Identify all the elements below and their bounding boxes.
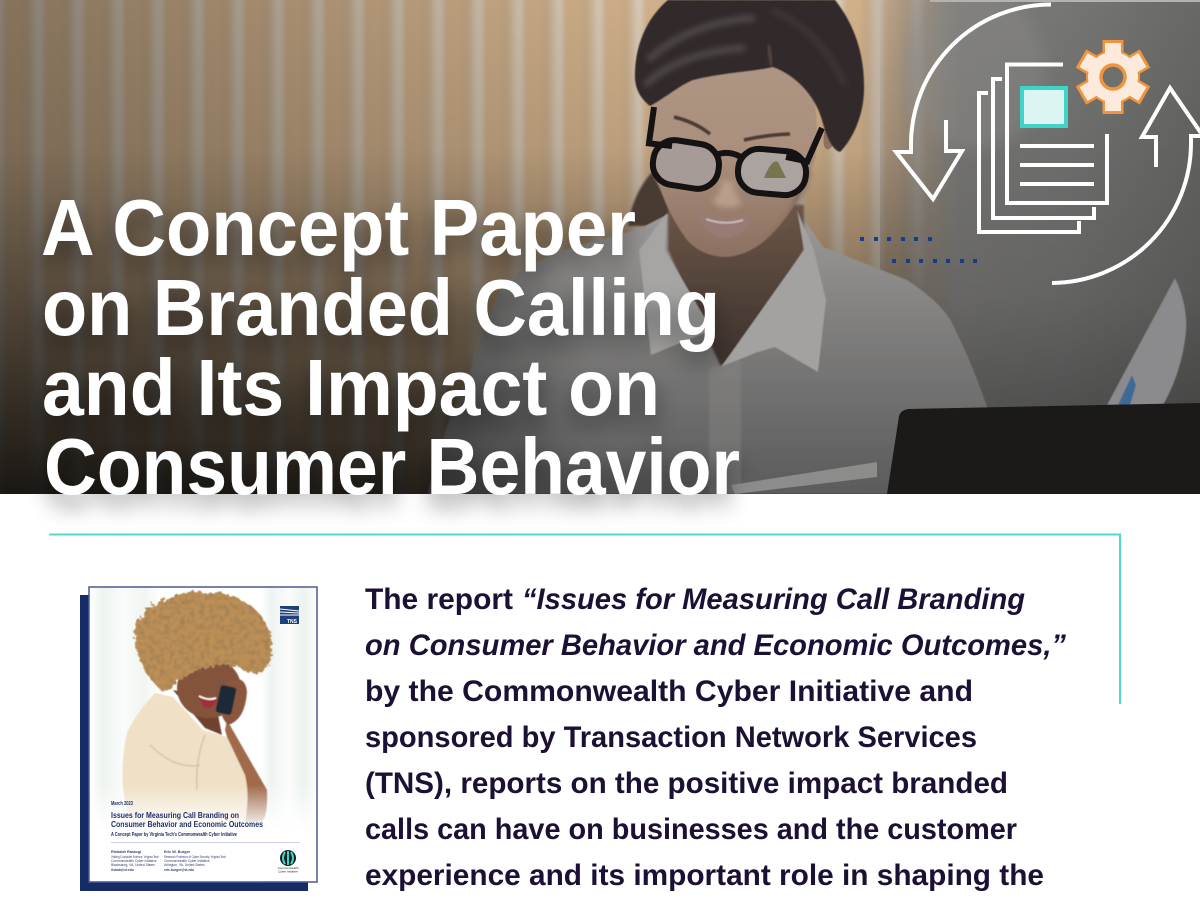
cover authors: Rishabh Rastogi xyxy=(111,850,141,854)
paper on lap xyxy=(731,462,877,494)
cover authors: Blacksburg, VA, United States xyxy=(111,863,155,867)
cover authors: rishab@vt.edu xyxy=(111,868,134,872)
button placket xyxy=(709,360,741,494)
cover text xyxy=(111,801,263,838)
braid xyxy=(628,172,672,226)
cover footer xyxy=(90,830,316,881)
document stack xyxy=(979,64,1107,232)
TNS logo: TNS xyxy=(287,619,298,625)
cover authors: Commonwealth Cyber Initiative xyxy=(164,859,210,863)
eyebrows xyxy=(674,117,790,140)
cover authors: Research Professor of Cyber Security, Virginia Tech xyxy=(164,855,226,859)
glasses xyxy=(646,107,822,197)
cover photo: woman on phone xyxy=(122,592,272,823)
title: Consumer Behavior xyxy=(44,422,740,511)
collar xyxy=(639,213,712,355)
hero photo: woman reading at a laptop xyxy=(0,0,1200,504)
body paragraph: calls can have on businesses and the customer xyxy=(365,813,1017,846)
cover text: Issues for Measuring Call Branding on xyxy=(111,810,239,820)
face xyxy=(651,50,817,257)
cycle arrow: up xyxy=(1052,88,1200,283)
cover authors: Visiting Computer Science, Virginia Tech xyxy=(111,855,159,859)
cover text: Consumer Behavior and Economic Outcomes xyxy=(111,819,263,829)
icon: document cycle with gear xyxy=(896,4,1200,283)
title: A Concept Paper xyxy=(41,183,636,272)
grey overlay panel on the right xyxy=(870,0,1200,408)
ear xyxy=(824,129,832,150)
laptop xyxy=(887,403,1200,494)
teal frame line xyxy=(49,534,1120,704)
cover divider xyxy=(111,842,300,843)
dotted accent lines xyxy=(860,237,977,263)
cover authors: Arlington, VA, United States xyxy=(164,863,205,867)
teal square xyxy=(1022,88,1066,126)
body paragraph: The report xyxy=(365,583,513,616)
curly hair xyxy=(135,592,272,692)
cheek shading xyxy=(778,171,812,226)
report cover xyxy=(80,587,317,891)
Commonwealth Cyber Initiative logo xyxy=(278,850,299,874)
cover page xyxy=(89,587,317,882)
nose xyxy=(712,180,742,208)
cover authors xyxy=(111,850,226,872)
shirt xyxy=(428,210,1000,494)
body paragraph: sponsored by Transaction Network Services xyxy=(365,721,977,754)
body paragraph: experience and its important role in shaping the xyxy=(365,859,1044,892)
document in background xyxy=(1107,278,1186,405)
neck xyxy=(668,200,804,367)
body paragraph: by the Commonwealth Cyber Initiative and xyxy=(365,675,973,708)
cover authors: Eric W. Burger xyxy=(164,850,191,854)
cover authors: eric.burger@vt.edu xyxy=(164,868,194,872)
cover text: A Concept Paper by Virginia Tech's Commonwealth Cyber Initiative xyxy=(111,832,237,838)
woman xyxy=(428,0,1000,494)
cover authors: Commonwealth Cyber Initiative xyxy=(111,859,157,863)
cycle arrow: down xyxy=(896,4,1051,199)
body paragraph xyxy=(365,583,1066,892)
title xyxy=(41,183,740,511)
mouth xyxy=(698,214,751,238)
striped curtain wall xyxy=(0,0,956,494)
title: on Branded Calling xyxy=(42,263,720,352)
Commonwealth Cyber Initiative logo: Commonwealth xyxy=(278,866,299,870)
TNS logo xyxy=(280,606,299,625)
hair xyxy=(635,0,864,152)
body paragraph: “Issues for Measuring Call Branding xyxy=(522,583,1025,616)
navy backing xyxy=(80,595,308,891)
gear xyxy=(1078,42,1148,112)
title: and Its Impact on xyxy=(42,343,660,432)
body paragraph: (TNS), reports on the positive impact branded xyxy=(365,767,1008,800)
body paragraph: on Consumer Behavior and Economic Outcomes,” xyxy=(365,629,1066,662)
photo fade xyxy=(90,785,316,830)
Commonwealth Cyber Initiative logo: Cyber Initiative xyxy=(278,870,298,874)
cover text: March 2023 xyxy=(111,801,133,807)
